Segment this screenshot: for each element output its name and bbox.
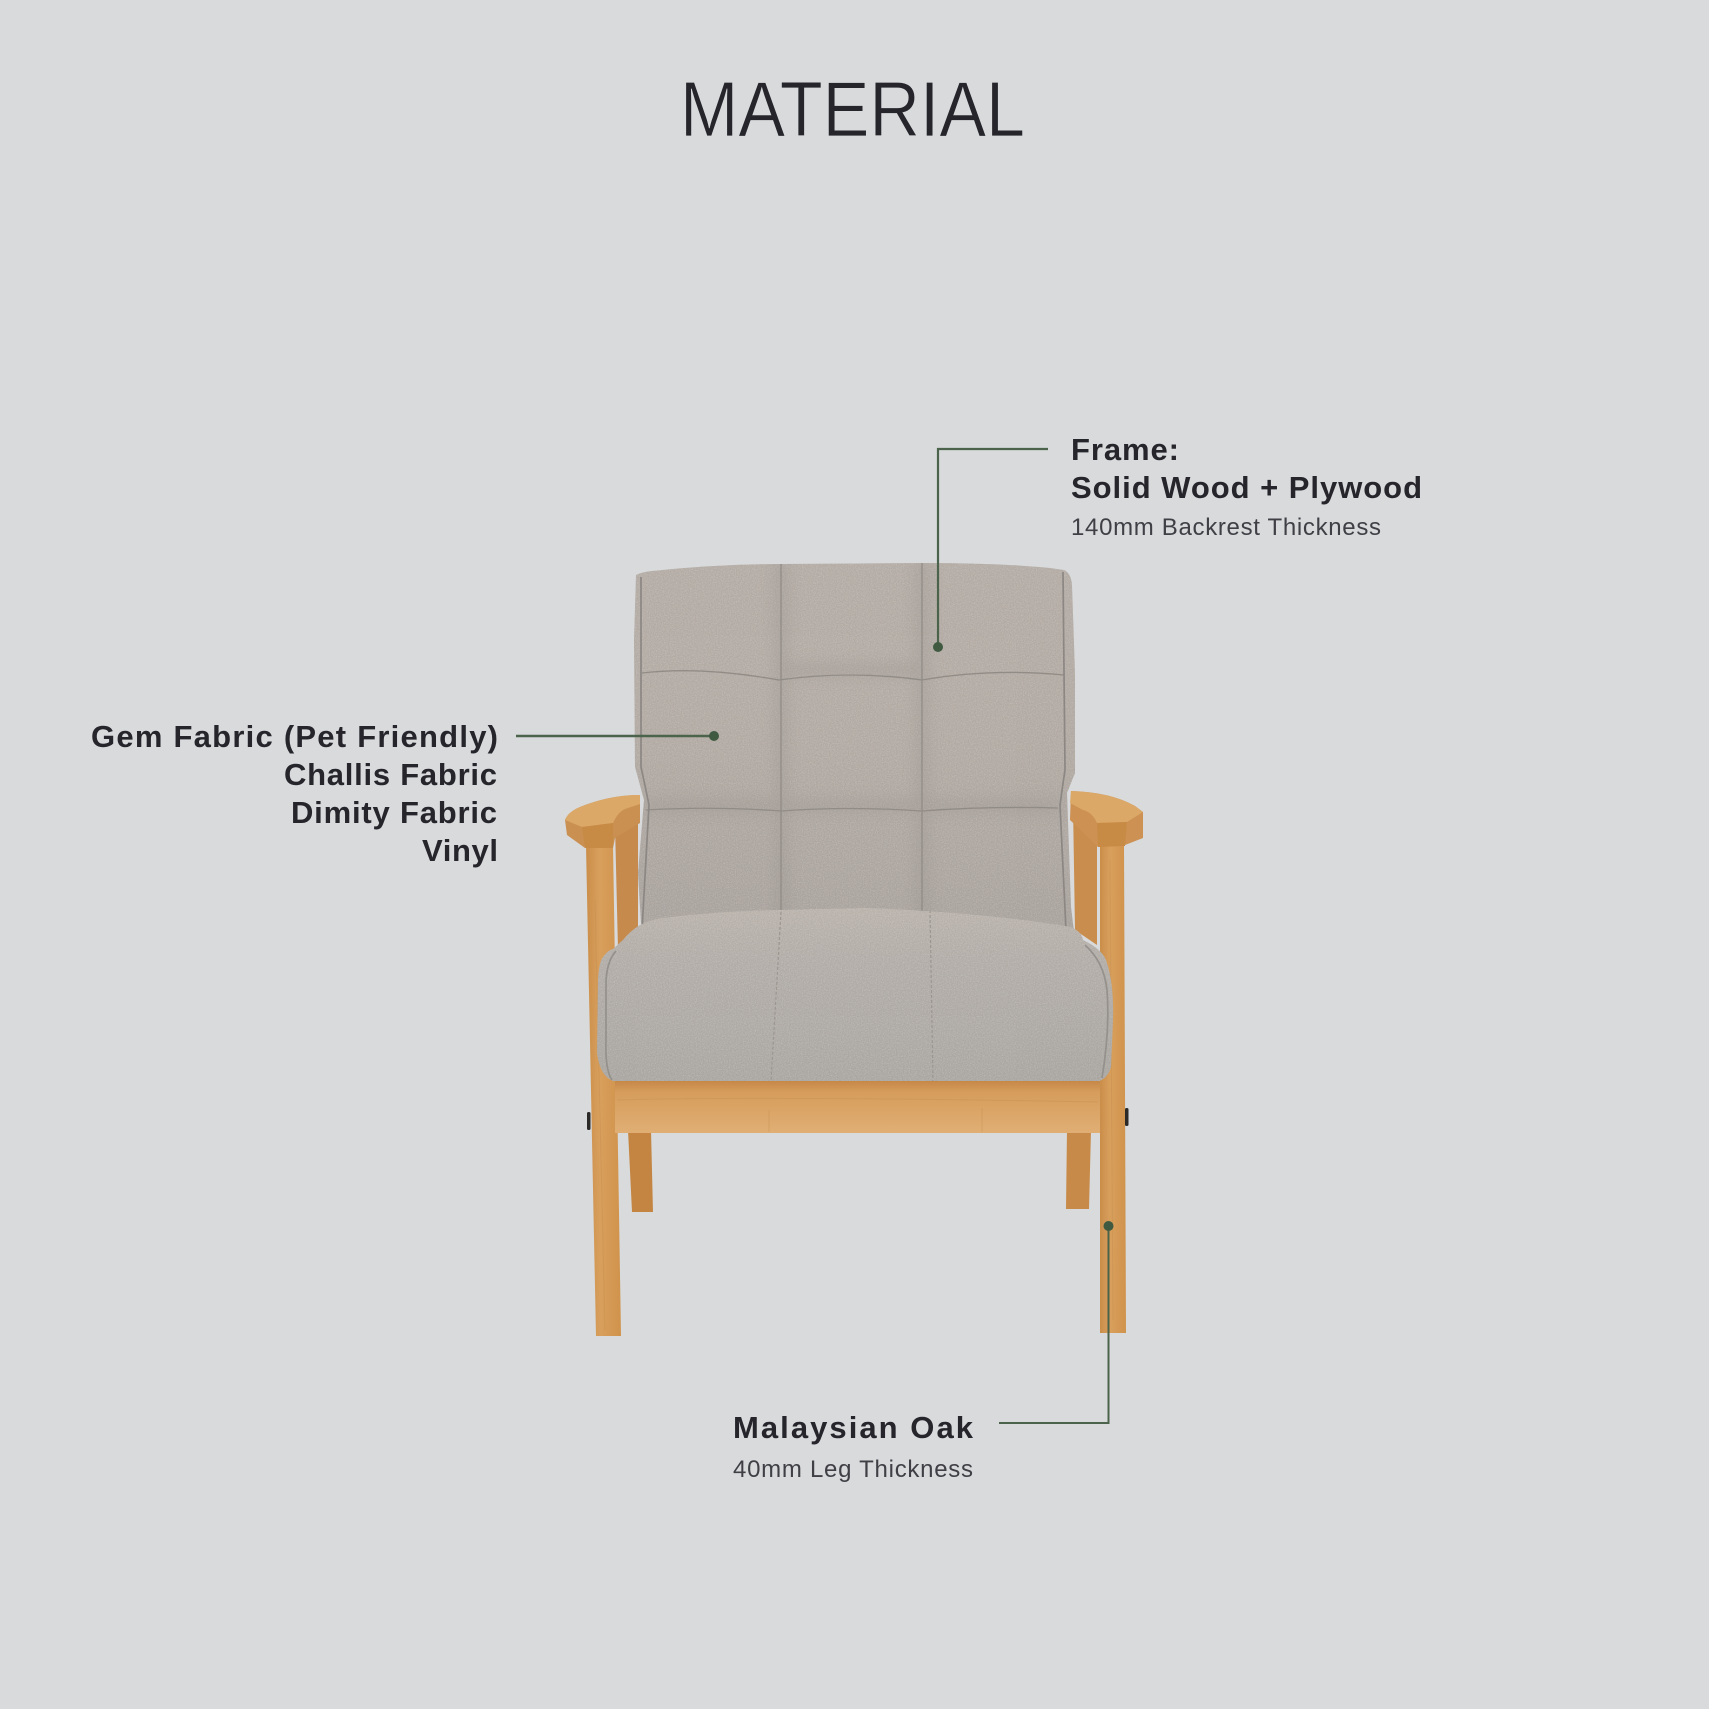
fabric options text: Gem Fabric (Pet Friendly) [91, 719, 498, 754]
front legs and apron rail [586, 845, 1128, 1336]
inner arm posts [615, 805, 1097, 950]
frame text: 140mm Backrest Thickness [1071, 514, 1381, 541]
title: MATERIAL [680, 65, 1025, 153]
leader line: wood [999, 1221, 1114, 1423]
callout: wood [733, 1221, 1114, 1483]
wood text: Malaysian Oak [733, 1410, 974, 1445]
fabric options text [91, 719, 498, 868]
callout: fabric [91, 719, 719, 868]
leader line: fabric [516, 731, 719, 741]
callout: frame [933, 432, 1422, 652]
frame text: Frame: [1071, 432, 1179, 467]
rear legs [628, 1130, 1091, 1212]
wood text: 40mm Leg Thickness [733, 1456, 973, 1483]
wood text [733, 1410, 974, 1483]
right armrest [1070, 791, 1143, 847]
fabric options text: Challis Fabric [284, 757, 497, 792]
fabric options text: Dimity Fabric [291, 795, 497, 830]
frame text: Solid Wood + Plywood [1071, 470, 1422, 505]
left armrest [565, 795, 640, 848]
frame text [1071, 432, 1422, 541]
leader line: frame [933, 449, 1048, 652]
fabric options text: Vinyl [422, 833, 498, 868]
armchair illustration [565, 555, 1143, 1336]
seat cushion [597, 908, 1114, 1081]
backrest cushion [634, 563, 1075, 928]
